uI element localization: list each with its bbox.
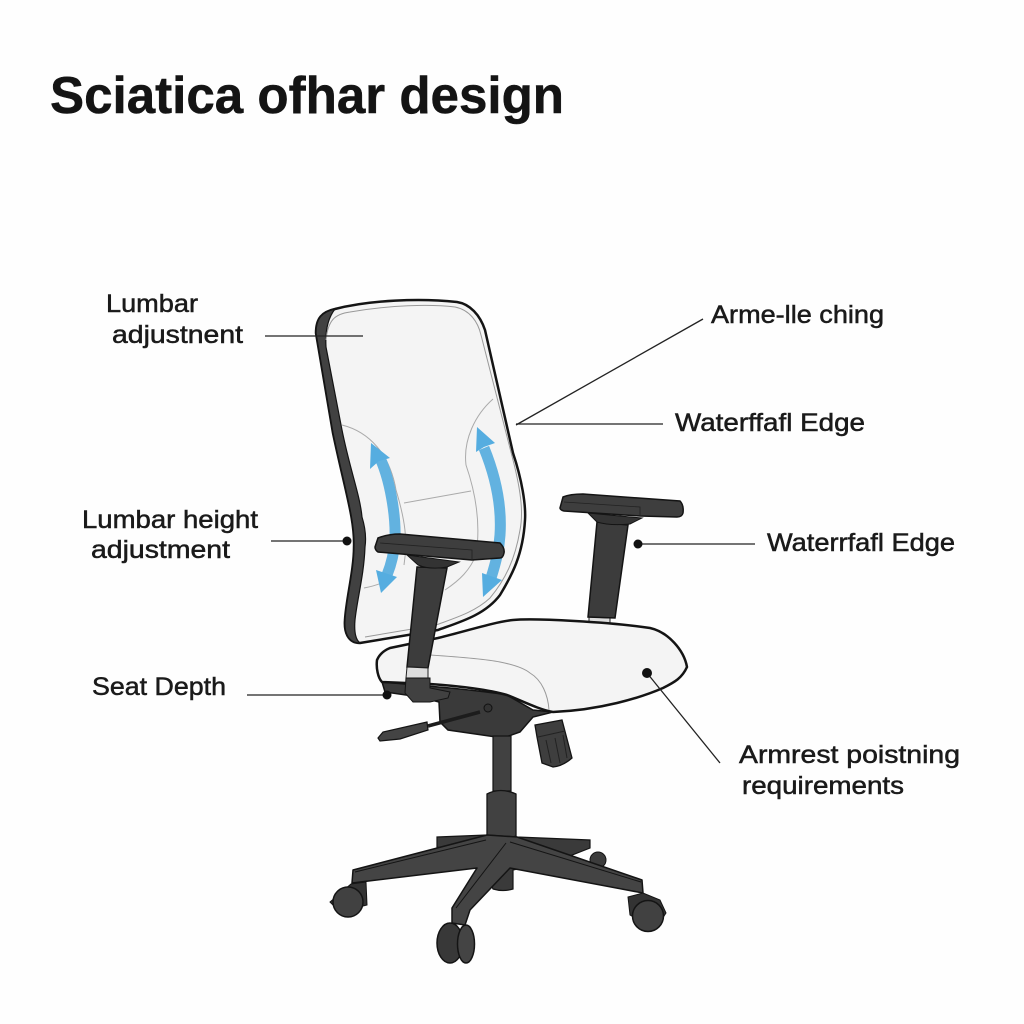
- label: waterfall edge top: Waterffafl Edge: [675, 409, 865, 437]
- backrest side frame: [316, 309, 366, 643]
- label: seat depth: Seat Depth: [92, 673, 226, 701]
- title: Sciatica ofhar design: [50, 67, 564, 125]
- label: armrest positioning requirements: [642, 668, 960, 800]
- label: waterfall edge right: [634, 529, 955, 557]
- chair illustration: [316, 300, 687, 963]
- label: lumbar adjustment: Lumbar: [106, 290, 198, 318]
- star base: [352, 835, 643, 925]
- label: arme-lle ching: Arme-lle ching: [711, 301, 884, 329]
- label: lumbar adjustment: [106, 290, 363, 349]
- casters: [330, 882, 666, 963]
- label: armrest positioning requirements: Armrest poistning: [739, 741, 960, 769]
- label: armrest positioning requirements: requirements: [742, 772, 904, 800]
- rear armrest: [560, 494, 683, 624]
- front armrest: [375, 534, 504, 702]
- label: lumbar height adjustment: adjustment: [91, 536, 230, 564]
- label: lumbar height adjustment: [82, 506, 352, 564]
- label: lumbar adjustment: adjustnent: [112, 321, 243, 349]
- gas cylinder: [487, 736, 516, 838]
- backrest: [316, 300, 525, 643]
- label: lumbar height adjustment: Lumbar height: [82, 506, 258, 534]
- label: waterfall edge right: Waterrfafl Edge: [767, 529, 955, 557]
- left double arrow: [370, 443, 397, 593]
- seat: [377, 619, 687, 712]
- tilt knob: [535, 720, 572, 767]
- backrest inner seams: [326, 305, 522, 637]
- right double arrow: [476, 427, 502, 597]
- seat mechanism: [378, 682, 572, 767]
- label: seat depth: [92, 673, 392, 701]
- label: arme-lle ching: [516, 301, 884, 425]
